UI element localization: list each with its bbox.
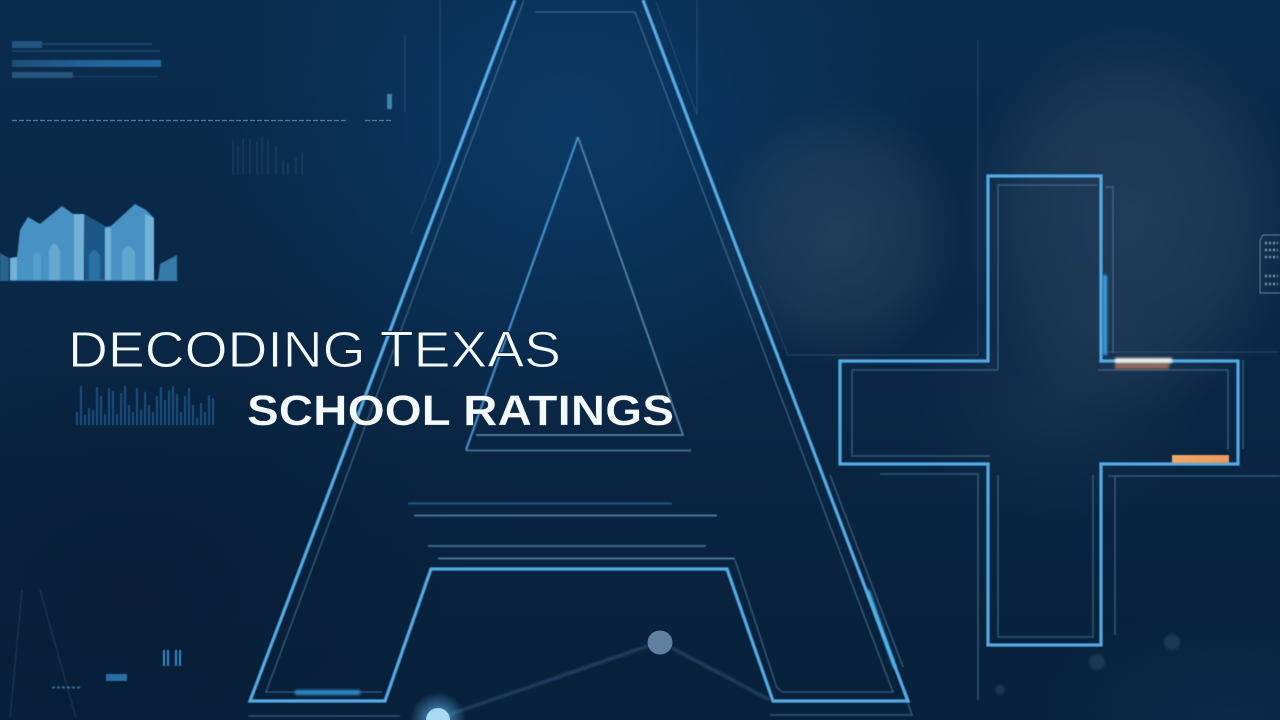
- letter A crossbar lines: [408, 504, 735, 558]
- faint mini bar chart: [233, 137, 302, 175]
- faint blurred dots: [995, 634, 1180, 695]
- lower left network lines: [10, 590, 76, 718]
- network node small: [648, 630, 672, 654]
- bar data widget: [12, 41, 161, 78]
- title line 1: DECODING TEXAS: [68, 321, 561, 378]
- right edge panel: [1260, 235, 1280, 293]
- small marker: [387, 94, 392, 109]
- orange bar accent: [1172, 455, 1229, 463]
- title line 2: SCHOOL RATINGS: [247, 388, 674, 435]
- building silhouette chart: [0, 204, 178, 281]
- dashed divider: [12, 120, 392, 122]
- letter A inner triangle: [466, 137, 691, 450]
- network node glowing: [410, 692, 466, 720]
- waveform chart: [77, 386, 213, 425]
- network lines: [445, 646, 770, 716]
- plus sign accents: [1105, 275, 1172, 369]
- letter A secondary outline: [248, 0, 912, 716]
- faint background lines: [405, 0, 1279, 355]
- lower left data ticks: [52, 650, 180, 688]
- A highlight accents: [295, 590, 895, 695]
- plus sign outline: [840, 176, 1238, 645]
- plus sign secondary outline: [852, 185, 1280, 700]
- letter A outline: [250, 0, 908, 701]
